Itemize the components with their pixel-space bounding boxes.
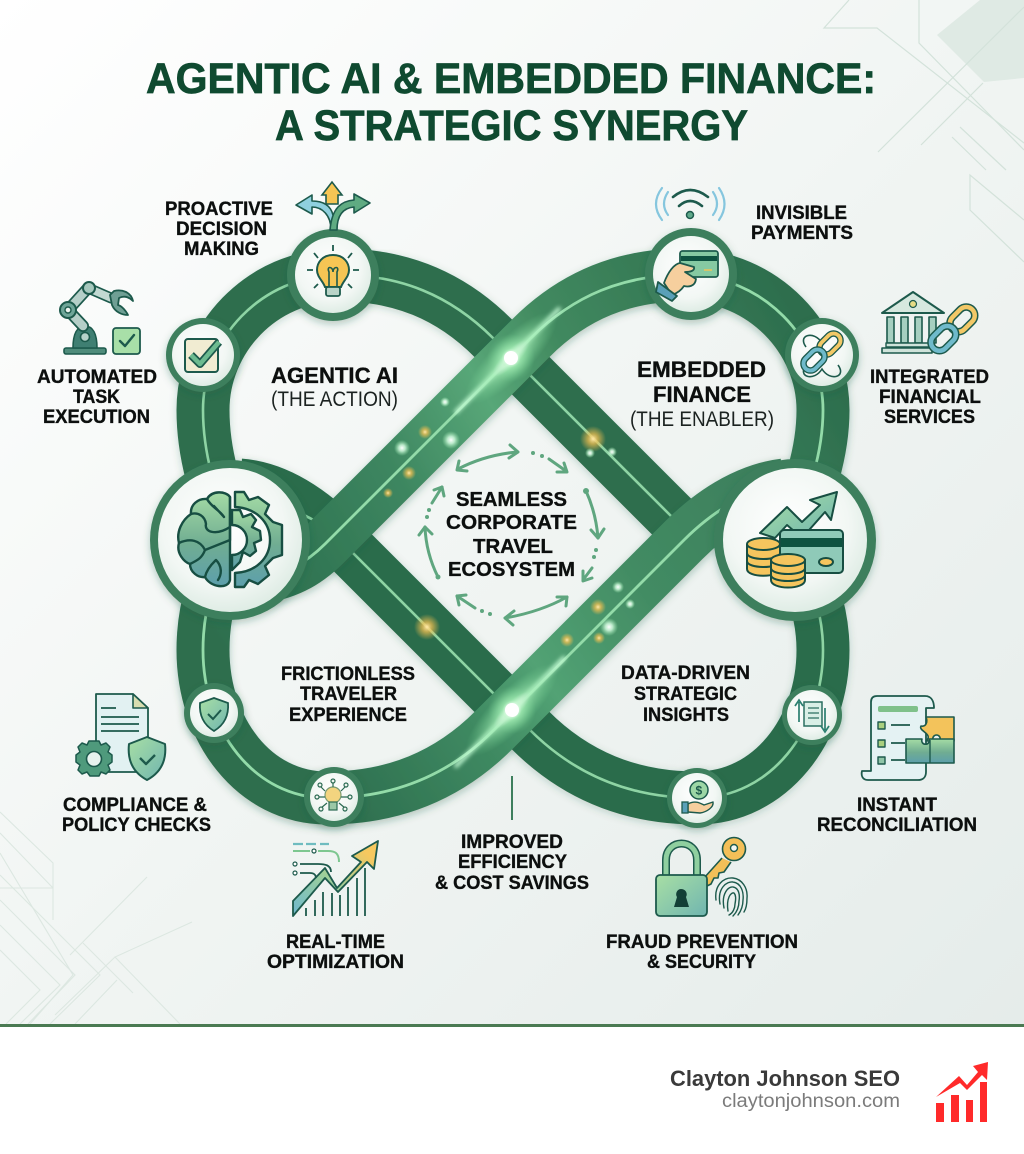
node: dollar in hand (667, 768, 727, 828)
icon: gear (232, 492, 282, 587)
footer logo (936, 1062, 988, 1122)
label: integrated financial services: INTEGRATED (870, 367, 989, 388)
decorative pattern: top right (824, 0, 1024, 262)
node: network bulb (304, 767, 364, 827)
ribbon strand: top-right loop (over) (255, 275, 823, 578)
label: real-time optimization (267, 932, 404, 973)
central cycle arrows (419, 445, 604, 625)
title (146, 55, 876, 150)
heading: Embedded Finance: EMBEDDED (637, 357, 766, 382)
center text: TRAVEL (473, 535, 553, 558)
heading: Embedded Finance: (THE ENABLER) (630, 408, 774, 431)
label: proactive decision making: PROACTIVE (165, 199, 273, 220)
icon: growth arrow (760, 492, 837, 538)
icon: wifi contactless (656, 188, 724, 220)
label: frictionless traveler experience: TRAVELER (300, 684, 397, 705)
label: data-driven strategic insights: DATA-DRIVEN (621, 663, 750, 684)
label: fraud prevention and security: FRAUD PREVENTION (606, 932, 798, 953)
label: invisible payments: PAYMENTS (751, 223, 853, 244)
center text: ECOSYSTEM (448, 558, 575, 581)
icon: lock, key and fingerprint (656, 838, 747, 916)
node: checkbox (166, 318, 240, 392)
label: real-time optimization: OPTIMIZATION (267, 952, 404, 973)
label: improved efficiency and cost savings: IMPROVED (461, 832, 563, 853)
node: chain links (785, 318, 859, 392)
infinity ribbon diagram (203, 275, 823, 798)
label: data-driven strategic insights (621, 663, 750, 726)
label: integrated financial services (870, 367, 989, 428)
decorative pattern: bottom left (0, 812, 192, 1024)
label: improved efficiency and cost savings: EFFICIENCY (458, 852, 567, 873)
label: instant reconciliation: RECONCILIATION (817, 815, 977, 836)
footer (0, 1024, 1024, 1154)
icon: bank and chain (882, 292, 978, 354)
title: A STRATEGIC SYNERGY (275, 102, 748, 150)
node: card in hand (645, 228, 737, 320)
hub: brain and gear (150, 460, 310, 620)
ribbon strand: top-left loop (under) (203, 275, 685, 530)
node: lightbulb (287, 229, 379, 321)
label: instant reconciliation (817, 795, 977, 836)
label: proactive decision making (165, 199, 273, 260)
label: compliance and policy checks: COMPLIANCE & (63, 795, 207, 816)
label: frictionless traveler experience: EXPERIENCE (289, 705, 407, 726)
label: frictionless traveler experience (281, 664, 415, 726)
glowing crossing: lower (454, 652, 570, 768)
icon: compliance document, gear, shield (76, 694, 165, 780)
heading: Agentic AI: (THE ACTION) (271, 388, 398, 411)
icon: optimization chart (293, 841, 378, 916)
node: dollar in hand: $ (696, 784, 702, 798)
label: integrated financial services: FINANCIAL (879, 387, 981, 408)
label: integrated financial services: SERVICES (884, 407, 975, 428)
label: fraud prevention and security: & SECURITY (647, 952, 756, 973)
heading: Agentic AI: AGENTIC AI (271, 363, 398, 388)
center text: SEAMLESS (456, 488, 567, 511)
ribbon strand: bottom-right loop (under) (240, 485, 823, 798)
icon: coins (747, 538, 805, 588)
label: proactive decision making: MAKING (184, 239, 259, 260)
label: invisible payments (751, 203, 853, 244)
title: AGENTIC AI & EMBEDDED FINANCE: (146, 55, 876, 103)
center text: CORPORATE (446, 511, 577, 534)
label: real-time optimization: REAL-TIME (286, 932, 385, 953)
footer brand name: claytonjohnson.com (722, 1091, 900, 1112)
icon: bank card (780, 530, 843, 573)
connector line: efficiency (511, 776, 513, 820)
label: compliance and policy checks: POLICY CHECKS (62, 815, 211, 836)
label: data-driven strategic insights: INSIGHTS (643, 705, 729, 726)
sparkles (383, 397, 635, 647)
footer brand name: Clayton Johnson SEO (670, 1066, 900, 1091)
label: automated task execution (37, 367, 157, 428)
icon: robot arm (60, 282, 140, 354)
hub: finance (714, 459, 876, 621)
heading: Embedded Finance: FINANCE (653, 382, 751, 407)
label: invisible payments: INVISIBLE (756, 203, 847, 224)
label: improved efficiency and cost savings: & COST SAVINGS (435, 873, 589, 894)
node: reconciliation doc (782, 685, 842, 745)
icon: reconciliation doc and puzzle (862, 696, 954, 780)
label: automated task execution: EXECUTION (43, 407, 150, 428)
ribbon strand: bottom-left loop (over) (203, 485, 784, 798)
label: data-driven strategic insights: STRATEGIC (634, 684, 737, 705)
label: automated task execution: AUTOMATED (37, 367, 157, 388)
label: automated task execution: TASK (73, 387, 120, 408)
label: instant reconciliation: INSTANT (857, 795, 937, 816)
label: improved efficiency and cost savings (435, 832, 589, 894)
icon: decision arrows (296, 182, 370, 230)
node: small shield (184, 683, 244, 743)
footer brand name (670, 1066, 900, 1112)
label: fraud prevention and security (606, 932, 798, 973)
glowing crossing: upper (453, 300, 569, 416)
heading: Agentic AI (271, 363, 398, 411)
icon: brain (178, 492, 230, 586)
center text (446, 488, 577, 581)
label: frictionless traveler experience: FRICTIONLESS (281, 664, 415, 685)
heading: Embedded Finance (630, 357, 774, 431)
label: proactive decision making: DECISION (176, 219, 267, 240)
label: compliance and policy checks (62, 795, 211, 836)
